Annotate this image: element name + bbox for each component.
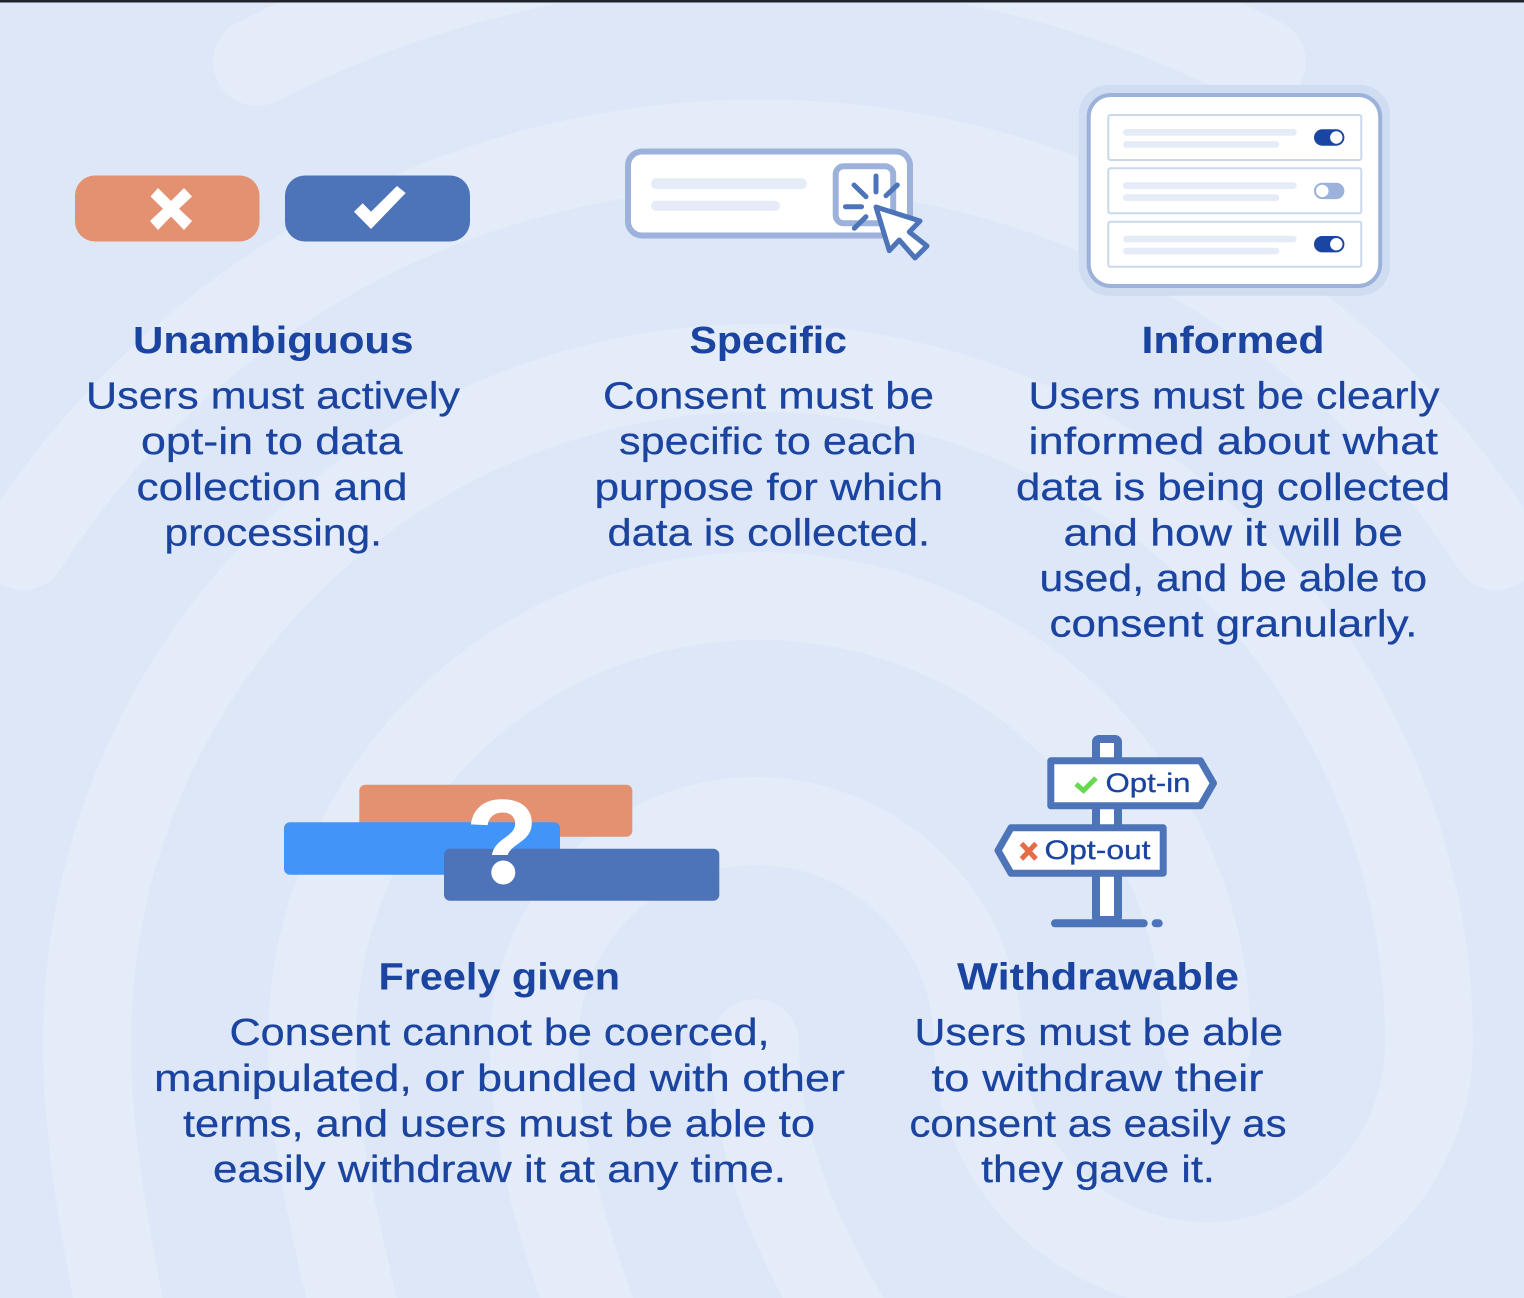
text: freely given description: Consent cannot be coerced, bbox=[230, 1012, 770, 1054]
heading: Specific: Specific bbox=[690, 320, 847, 362]
text: withdrawable description: consent as easily as bbox=[910, 1104, 1286, 1146]
text: unambiguous description: processing. bbox=[164, 512, 382, 554]
text: freely given description: terms, and users must be able to bbox=[183, 1104, 815, 1146]
text: informed description: Users must be clearly bbox=[1028, 376, 1440, 418]
text: unambiguous description: opt-in to data bbox=[141, 421, 404, 463]
heading: Unambiguous: Unambiguous bbox=[133, 320, 414, 362]
icon: consent bar with clicked button bbox=[628, 152, 927, 258]
text: unambiguous description: Users must actively bbox=[86, 376, 460, 418]
text: informed description: informed about what bbox=[1028, 421, 1439, 463]
icon: opt-in and opt-out signpost bbox=[998, 739, 1214, 927]
panel: freely given bbox=[154, 775, 845, 1191]
panel: specific bbox=[594, 152, 943, 554]
text: specific description bbox=[594, 376, 943, 554]
text: freely given description: manipulated, or bundled with other bbox=[154, 1058, 845, 1100]
text: informed description bbox=[1016, 376, 1450, 646]
panel: withdrawable bbox=[910, 739, 1286, 1191]
text: unambiguous description: collection and bbox=[136, 467, 408, 509]
sign: opt-in: Opt-in bbox=[1106, 768, 1190, 798]
text: informed description: and how it will be bbox=[1064, 512, 1403, 554]
panel: informed bbox=[1016, 85, 1450, 646]
text: specific description: purpose for which bbox=[594, 467, 943, 509]
text: withdrawable description: to withdraw their bbox=[932, 1058, 1264, 1100]
sign: opt-out bbox=[998, 828, 1163, 873]
icon: reject and accept buttons bbox=[75, 176, 470, 242]
icon: stacked bars with question mark: ? bbox=[465, 775, 539, 909]
icon: toggle off bbox=[1314, 183, 1344, 199]
heading: Withdrawable: Withdrawable bbox=[957, 956, 1239, 998]
icon: toggle on bbox=[1314, 129, 1344, 146]
text: specific description: data is collected. bbox=[608, 512, 930, 554]
text: unambiguous description bbox=[86, 376, 460, 554]
sign: opt-in bbox=[1051, 761, 1214, 806]
panel: unambiguous bbox=[75, 176, 470, 554]
sign: opt-out: Opt-out bbox=[1044, 835, 1151, 865]
text: freely given description bbox=[154, 1012, 845, 1191]
text: informed description: consent granularly. bbox=[1050, 604, 1418, 646]
text: withdrawable description: they gave it. bbox=[981, 1149, 1215, 1191]
text: freely given description: easily withdraw it at any time. bbox=[213, 1149, 786, 1191]
icon: toggle on bbox=[1314, 236, 1344, 252]
text: informed description: used, and be able to bbox=[1040, 558, 1427, 600]
icon: consent settings window with toggles bbox=[1079, 85, 1390, 296]
text: specific description: Consent must be bbox=[603, 376, 934, 418]
icon: stacked bars with question mark bbox=[284, 784, 720, 901]
text: withdrawable description: Users must be able bbox=[914, 1012, 1283, 1054]
heading: Informed: Informed bbox=[1142, 320, 1324, 362]
text: informed description: data is being collected bbox=[1016, 467, 1450, 509]
text: withdrawable description bbox=[910, 1012, 1286, 1191]
text: specific description: specific to each bbox=[619, 421, 916, 463]
heading: Freely given: Freely given bbox=[378, 956, 620, 998]
